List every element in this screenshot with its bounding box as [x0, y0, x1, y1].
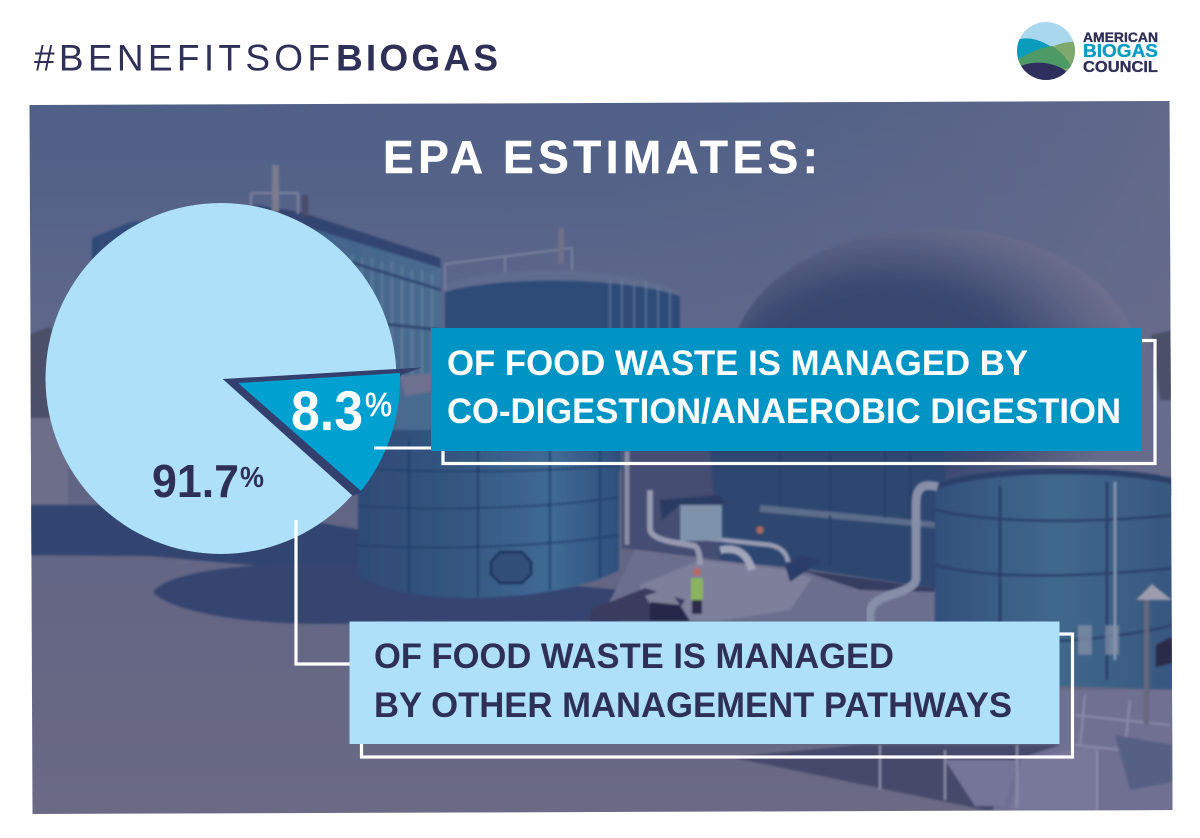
- connector: 8.3% to callout: [374, 446, 432, 450]
- callout text: OF FOOD WASTE IS MANAGED BY: [447, 344, 1028, 383]
- photo totes at lower right: [730, 584, 1175, 815]
- logo: American Biogas Council: [1017, 22, 1158, 82]
- pie slice: other pathways 91.7%: [46, 203, 396, 554]
- heading: hashtag: #BENEFITSOF: [34, 38, 330, 78]
- photo ground: [20, 420, 1180, 820]
- callout box: [431, 328, 1142, 451]
- logo wordmark: AMERICAN: [1083, 29, 1158, 45]
- heading: hashtag: [34, 38, 498, 78]
- value: 91.7 percent sign: %: [240, 462, 264, 494]
- logo wordmark: [1083, 29, 1158, 76]
- photo gas dome: [738, 234, 1122, 481]
- chart: pie of food waste management: [46, 203, 422, 554]
- value: 91.7: 91.7: [152, 455, 239, 507]
- photo tank two: [445, 228, 680, 470]
- photo right tank: [935, 471, 1175, 690]
- photo light pipe: [870, 486, 938, 622]
- value: 8.3: 8.3: [291, 379, 363, 442]
- connector: 91.7% to callout: [296, 520, 350, 664]
- photo front tank: [358, 430, 619, 598]
- callout offset outline: [362, 634, 1072, 757]
- callout text: CO-DIGESTION/ANAEROBIC DIGESTION: [447, 392, 1121, 431]
- callout: co-digestion: [431, 328, 1155, 464]
- icon: logo landscape circle: [1017, 22, 1076, 82]
- logo wordmark: BIOGAS: [1083, 41, 1158, 61]
- callout box: [350, 622, 1060, 744]
- callout text: [447, 344, 1121, 431]
- photo sky: [20, 95, 1180, 495]
- logo wordmark: COUNCIL: [1083, 59, 1158, 76]
- photo pad and pipework: [590, 451, 935, 621]
- heading: hashtag: BIOGAS: [336, 38, 498, 78]
- photo trees and house: [28, 327, 1175, 505]
- slice outline: [223, 368, 422, 496]
- title: EPA estimates: EPA ESTIMATES:: [383, 131, 818, 183]
- photo shadows on ground: [28, 505, 620, 624]
- callout text: BY OTHER MANAGEMENT PATHWAYS: [374, 686, 1012, 725]
- callout text: OF FOOD WASTE IS MANAGED: [374, 637, 894, 676]
- callout: other pathways: [350, 622, 1072, 757]
- photo tank one: [92, 165, 441, 445]
- callout text: [374, 637, 1012, 725]
- callout offset outline: [443, 340, 1155, 464]
- value: 8.3 percent sign: %: [365, 386, 392, 423]
- pie slice: co-digestion 8.3%: [238, 373, 400, 491]
- photo back tank: [622, 445, 945, 590]
